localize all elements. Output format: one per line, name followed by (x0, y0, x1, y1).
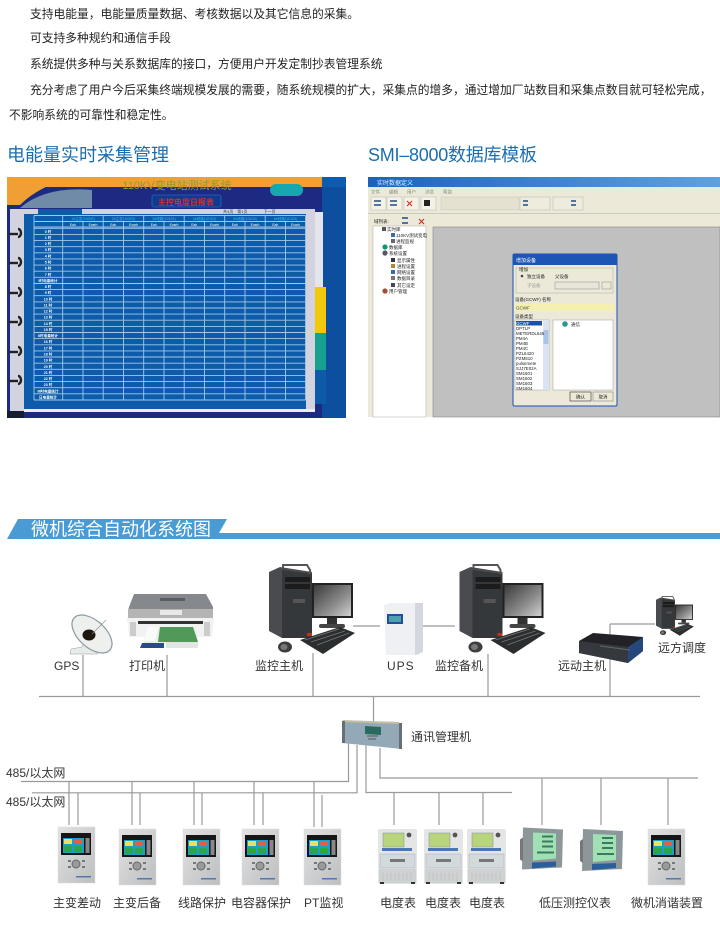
label: energy meter 2: 电度表 (425, 895, 461, 910)
row labels: 6 时 (45, 266, 52, 271)
row labels: 0 时 (45, 229, 52, 234)
label: energy meter 1: 电度表 (380, 895, 416, 910)
device type list: PZL6420 (516, 351, 534, 356)
row labels: 1 时 (45, 235, 52, 240)
device type list (515, 320, 549, 391)
dialog: add device: 增加设备 (516, 257, 536, 264)
device type list: PZM810 (516, 356, 533, 361)
row labels: 19 时 (44, 358, 53, 363)
label: line protection: 线路保护 (178, 895, 226, 910)
device: capacitor protection (242, 829, 279, 885)
heading: energy real-time collection: 电能量实时采集管理 (7, 145, 169, 165)
icon: communication manager (342, 720, 402, 749)
label: harmonic suppression: 微机消谐装置 (631, 896, 703, 910)
column headers: Evarh (170, 223, 179, 227)
label: 485 network upper: 485/以太网 (6, 765, 65, 780)
device type list: SM1601 (516, 371, 533, 376)
row labels: 21 时 (44, 370, 53, 375)
column headers: 1#主变(10001) (71, 216, 95, 221)
column headers: Evarh (89, 223, 98, 227)
device tree list (553, 320, 613, 390)
device: PT monitor (304, 829, 341, 885)
column headers: Evarh (129, 223, 138, 227)
device type list: PM4A (516, 336, 528, 341)
label: communication manager: 通讯管理机 (411, 729, 471, 744)
column headers: 4#线路(10102) (193, 216, 216, 221)
row labels: 23 时 (44, 382, 53, 387)
icon: monitoring standby host (460, 565, 546, 654)
device type list: PM4B (516, 341, 528, 346)
row labels: 20 时 (44, 364, 53, 369)
section banner (7, 519, 720, 540)
row labels: 10 时 (44, 296, 53, 301)
label: low-voltage instruments: 低压测控仪表 (539, 896, 611, 910)
device: line protection (183, 829, 220, 885)
row labels: 17 时 (44, 345, 53, 350)
row labels: III时电量统计 (38, 388, 59, 393)
row labels: 8 时 (45, 284, 52, 289)
device: main transformer backup (119, 829, 156, 885)
column headers: Eah (232, 223, 238, 227)
system title: 110KV变电站测试系统 (122, 178, 232, 192)
dialog: add device: 设备类型 (515, 313, 533, 320)
dialog: add device: 独立设备 (527, 273, 545, 280)
icon: GPS dish (65, 608, 119, 660)
label: main transformer differential: 主变差动 (53, 895, 101, 910)
tree entries: 实时库 (387, 226, 401, 233)
report title: 主控电度日报表 (158, 197, 214, 207)
tree entries (387, 226, 428, 295)
device: main transformer differential (58, 827, 95, 883)
column headers: Eah (272, 223, 278, 227)
dialog: add device: 父设备 (555, 273, 569, 280)
row labels: 22 时 (44, 376, 53, 381)
icon: printer (127, 594, 214, 648)
row labels: 日电量统计 (39, 394, 57, 400)
heading: database template: SMI–8000数据库模板 (368, 145, 537, 165)
icon: telecontrol host (579, 633, 643, 663)
device: low-voltage instrument 2 (580, 829, 623, 871)
row labels: 18 时 (44, 352, 53, 356)
device: harmonic suppression (648, 829, 685, 885)
window title bar (368, 177, 720, 187)
menu bar: 文件 编辑 用户 浏览 帮助 (371, 188, 452, 196)
device: energy meter 3 (467, 829, 506, 884)
intro line 3: 系统提供多种与关系数据库的接口，方便用户开发定制抄表管理系统 (30, 57, 383, 71)
tree entries: 显示属性 (397, 257, 415, 264)
row labels (38, 229, 59, 400)
toolbar (371, 197, 583, 210)
column headers: 3#线路(10101) (152, 216, 176, 221)
device: low-voltage instrument 1 (520, 828, 563, 870)
row labels: 14 时 (44, 321, 53, 326)
column headers: 6#线路(10104) (274, 216, 297, 221)
row labels: 5 时 (45, 260, 52, 264)
row labels: 9 时 (45, 290, 52, 295)
row labels: 12 时 (44, 309, 53, 314)
column headers (70, 216, 300, 227)
intro text block (9, 7, 712, 122)
panel: energy report screenshot (7, 177, 346, 418)
tree entries: 进程监视 (396, 238, 414, 245)
icon: remote dispatch computer (656, 597, 694, 636)
label: energy meter 3: 电度表 (469, 895, 505, 910)
device type list: GCWF (516, 321, 530, 326)
column headers: Evarh (210, 223, 219, 227)
column headers: Evarh (251, 223, 260, 227)
data table (24, 214, 306, 409)
column headers: 2#主变(10002) (112, 216, 135, 221)
network wiring (21, 624, 700, 827)
notebook page (10, 209, 315, 412)
label: printer: 打印机 (129, 659, 165, 673)
device type list: SM1604 (516, 386, 533, 391)
label: capacitor protection: 电容器保护 (231, 895, 291, 910)
intro line 2: 可支持多种规约和通信手段 (30, 31, 171, 45)
row labels: 4 时 (45, 253, 52, 258)
intro line 4: 充分考虑了用户今后采集终端规模发展的需要，随系统规模的扩大，采集点的增多，通过增加厂站数目和采集点数目就可轻松完成， (30, 83, 712, 97)
row labels: 13 时 (44, 315, 53, 320)
intro line 1: 支持电能量，电能量质量数据、考核数据以及其它信息的采集。 (30, 7, 359, 21)
row labels: 16 时 (44, 339, 53, 344)
banner title: 微机综合自动化系统图 (31, 520, 211, 540)
label: GPS: GPS (54, 659, 79, 673)
label: 485 network lower: 485/以太网 (6, 794, 65, 809)
column headers: Evarh (291, 223, 300, 227)
tree entries: 其它设定 (397, 282, 415, 289)
dialog: add device (513, 254, 617, 406)
column headers: Eah (70, 223, 76, 227)
tree entries: 数据库 (389, 244, 403, 251)
device type list: SM1603 (516, 381, 533, 386)
tree entries: 网络设置 (397, 269, 415, 276)
row labels: 15 时 (44, 327, 53, 332)
grey workspace (433, 227, 720, 417)
column headers: Eah (151, 223, 157, 227)
dialog: add device: 设备(GCWF) 名称 (515, 296, 551, 303)
tree entries: 进程设置 (397, 263, 415, 270)
station tree panel (368, 213, 720, 417)
dialog buttons: 取消 (598, 394, 608, 400)
label: telecontrol host: 远动主机 (558, 659, 606, 673)
dialog: add device: 子设备 (527, 282, 541, 289)
row labels: II时电量统计 (38, 333, 58, 338)
binder rings (9, 229, 21, 384)
device type list: SJJ7E02A (516, 366, 537, 371)
device type list: SM1602 (516, 376, 533, 381)
device: energy meter 2 (424, 829, 463, 884)
label: main transformer backup: 主变后备 (113, 895, 161, 910)
column headers: 5#线路(10103) (233, 216, 257, 221)
label: PT monitor: PT监视 (304, 895, 343, 910)
device type list: DPTLP (516, 326, 530, 331)
device type list: pulsemete (516, 361, 537, 366)
panel: database template screenshot: 实时数据定义 (377, 179, 413, 187)
index tabs (315, 212, 326, 404)
dialog: add device: GCWF (516, 306, 530, 310)
tree entries: 系统设置 (389, 250, 407, 257)
icon: monitoring host (269, 565, 355, 654)
icon: UPS (384, 603, 423, 655)
device: energy meter 1 (378, 829, 417, 884)
row labels: 7 时 (45, 272, 52, 277)
label: UPS: UPS (387, 659, 415, 673)
intro line 5: 不影响系统的可靠性和稳定性。 (9, 108, 174, 122)
page nav: 共4页 第1页 下一页 (223, 208, 275, 214)
device type list: PM4C (516, 346, 528, 351)
row labels: I时电量统计 (39, 278, 58, 283)
station tree panel: 域列表: (374, 218, 389, 225)
tree entries: 数据目录 (397, 275, 415, 282)
column headers: Eah (191, 223, 197, 227)
device type list: METERDL645 (516, 331, 545, 336)
panel: database template screenshot (368, 177, 720, 417)
tree entries: 用户管理 (389, 288, 407, 295)
tree entries: 110KV测试变电 (396, 232, 428, 239)
row labels: 2 时 (45, 241, 52, 246)
column headers: Eah (110, 223, 116, 227)
row labels: 3 时 (45, 247, 52, 252)
label: monitoring host: 监控主机 (255, 659, 303, 673)
label: remote dispatch: 远方调度 (658, 640, 706, 655)
label: monitoring standby: 监控备机 (435, 659, 483, 673)
dialog buttons: 确认 (576, 394, 585, 400)
dialog: add device: 增加 (519, 266, 528, 273)
device tree list: 通信 (571, 321, 580, 328)
row labels: 11 时 (44, 302, 53, 307)
dialog buttons (570, 392, 613, 401)
